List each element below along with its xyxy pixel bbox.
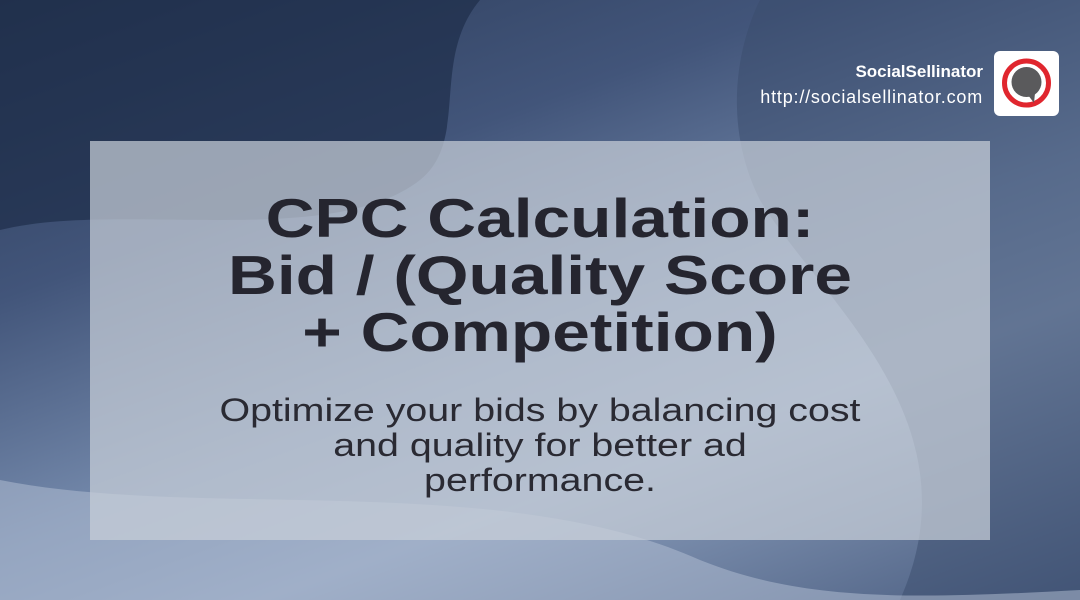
brand text bbox=[760, 62, 983, 107]
title: + Competition) bbox=[302, 301, 778, 363]
title: CPC Calculation: bbox=[266, 187, 814, 249]
title bbox=[228, 187, 852, 363]
title: Bid / (Quality Score bbox=[228, 244, 852, 306]
subtitle text bbox=[219, 392, 860, 498]
brand text: SocialSellinator bbox=[855, 62, 983, 81]
panel: translucent card bbox=[90, 141, 990, 540]
subtitle text: Optimize your bids by balancing cost bbox=[219, 392, 860, 428]
brand text: http://socialsellinator.com bbox=[760, 87, 983, 107]
subtitle text: performance. bbox=[424, 462, 656, 498]
subtitle text: and quality for better ad bbox=[333, 427, 747, 463]
icon: logo bbox=[994, 51, 1059, 116]
